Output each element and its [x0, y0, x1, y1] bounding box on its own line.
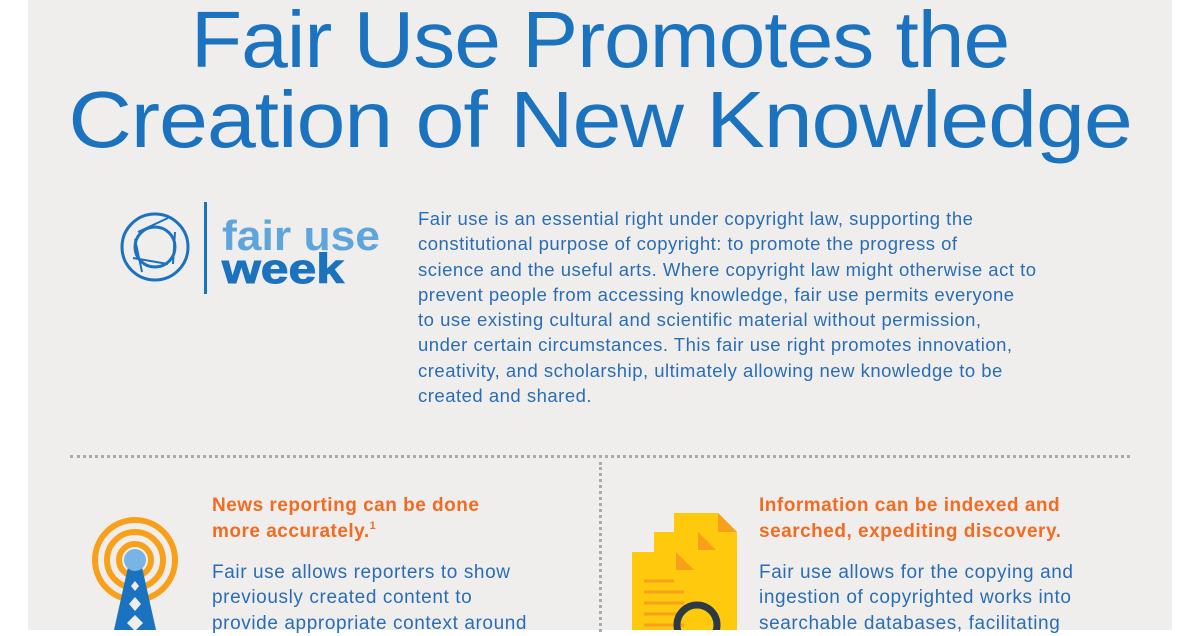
- heading: news reporting: News reporting can be done: [212, 495, 479, 516]
- heading: information indexed: Information can be indexed and: [759, 495, 1060, 516]
- logo: fair use week: fair use: [222, 212, 380, 259]
- title: Creation of New Knowledge: [68, 75, 1132, 164]
- logo: fair use week: [120, 202, 380, 294]
- intro text: created and shared.: [418, 385, 592, 406]
- intro text: [418, 208, 1037, 406]
- heading: news reporting: [212, 495, 479, 542]
- text: information indexed: searchable databases, facilitating: [759, 613, 1060, 634]
- text: information indexed: ingestion of copyrighted works into: [759, 587, 1072, 608]
- intro text: creativity, and scholarship, ultimately allowing new knowledge to be: [418, 360, 1003, 381]
- text: information indexed: [759, 562, 1074, 634]
- text: news reporting: [212, 562, 527, 634]
- text: news reporting: provide appropriate context around: [212, 613, 527, 634]
- intro text: under certain circumstances. This fair use right promotes innovation,: [418, 334, 1013, 355]
- icon: radio tower: [92, 517, 178, 630]
- heading: information indexed: searched, expediting discovery.: [759, 521, 1061, 542]
- heading: information indexed: [759, 495, 1061, 542]
- logo: fair use week: week: [221, 245, 345, 292]
- text: news reporting: previously created content to: [212, 587, 472, 608]
- text: news reporting: Fair use allows reporters to show: [212, 562, 511, 583]
- intro text: constitutional purpose of copyright: to promote the progress of: [418, 233, 958, 254]
- intro text: prevent people from accessing knowledge, fair use permits everyone: [418, 284, 1015, 305]
- title: [68, 0, 1132, 164]
- icon: documents with magnifier: [632, 513, 737, 630]
- intro text: science and the useful arts. Where copyright law might otherwise act to: [418, 259, 1037, 280]
- text: information indexed: Fair use allows for the copying and: [759, 562, 1074, 583]
- intro text: Fair use is an essential right under copyright law, supporting the: [418, 208, 973, 229]
- intro text: to use existing cultural and scientific material without permission,: [418, 309, 982, 330]
- heading: news reporting: more accurately.1: [212, 520, 376, 542]
